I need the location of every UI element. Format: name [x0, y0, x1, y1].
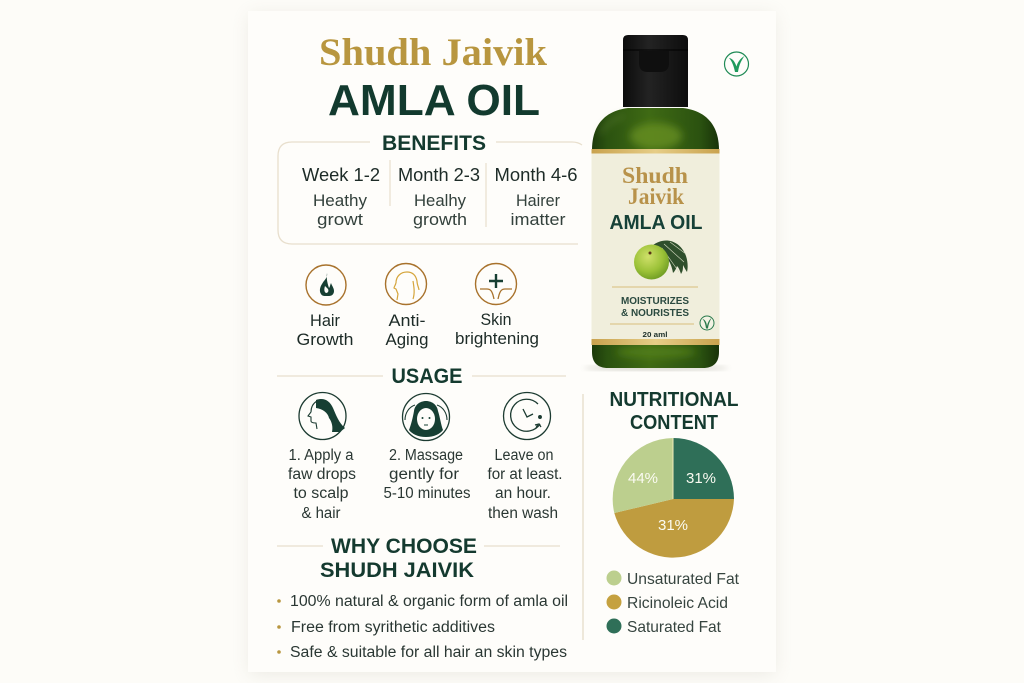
text: step 2: gently for: [389, 466, 459, 483]
text: step 3: an hour.: [495, 485, 551, 502]
text: step 3: [488, 447, 562, 522]
column: month 4-6: Hairer: [516, 192, 560, 210]
icon: apply to scalp: [299, 392, 346, 440]
heading: why choose: SHUDH JAIVIK: [320, 559, 474, 582]
icon: amla fruit: [634, 241, 688, 280]
text: step 2: 5-10 minutes: [384, 485, 471, 502]
bottle label: [592, 149, 720, 345]
heading: nutritional content: [610, 389, 738, 434]
label volume: 20 aml: [642, 330, 668, 339]
column: week 1-2: [302, 165, 380, 229]
title: AMLA OIL: [328, 76, 540, 125]
heading: benefits: BENEFITS: [382, 132, 486, 155]
text: step 2: 2. Massage: [389, 447, 463, 464]
text: step 1: faw drops: [288, 466, 356, 483]
label claim: MOISTURIZES: [621, 295, 689, 307]
pie chart: [613, 438, 734, 558]
icon: skin brightening: [476, 264, 516, 304]
icon: hair growth: [306, 265, 346, 305]
icon: bottle: [592, 35, 720, 368]
column: month 2-3: Month 2-3: [398, 165, 480, 185]
label: skin: Skin: [480, 310, 512, 329]
column: month 4-6: [494, 165, 578, 229]
panel: sheet: [248, 11, 776, 672]
legend: Ricinoleic Acid: [627, 595, 728, 612]
label product name: AMLA OIL: [610, 211, 702, 234]
text: step 3: then wash: [488, 505, 558, 522]
column: week 1-2: Heathy: [313, 192, 368, 210]
label: anti: Anti-: [388, 311, 426, 330]
text: step 2: [384, 447, 471, 502]
text: step 1: 1. Apply a: [288, 447, 354, 464]
bottle shadow: [584, 366, 728, 370]
pie chart: 31%: [686, 470, 716, 487]
legend: [606, 570, 740, 636]
icon: clock: [504, 392, 550, 440]
title: Shudh Jaivik: [319, 31, 547, 74]
title: [319, 31, 547, 125]
bottle cap: [623, 35, 688, 107]
heading: usage: USAGE: [392, 365, 462, 388]
list: reasons: [277, 593, 568, 661]
list: reasons: Safe & suitable for all hair an skin types: [290, 644, 567, 661]
text: step 3: Leave on: [494, 447, 554, 464]
label: growth: Growth: [296, 330, 354, 349]
bottle label: Jaivik: [628, 184, 684, 209]
icon: anti-aging: [386, 264, 426, 304]
icon: vegan badge: [724, 52, 748, 76]
text: step 1: [288, 447, 356, 522]
column: month 2-3: growth: [413, 211, 467, 229]
column: week 1-2: Week 1-2: [302, 165, 380, 185]
list: reasons: 100% natural & organic form of amla oil: [290, 593, 568, 610]
column: month 2-3: Healhy: [414, 192, 467, 210]
heading: nutritional content: NUTRITIONAL: [610, 389, 738, 411]
heading: why choose: WHY CHOOSE: [331, 535, 477, 558]
heading: nutritional content: CONTENT: [630, 412, 718, 434]
column: month 4-6: imatter: [510, 211, 566, 229]
label: hair: Hair: [310, 311, 340, 330]
text: step 1: to scalp: [294, 485, 348, 502]
text: step 3: for at least.: [488, 466, 562, 483]
pie chart: 31%: [658, 517, 688, 534]
legend: Saturated Fat: [627, 619, 722, 636]
column: week 1-2: growt: [317, 211, 363, 229]
column: month 2-3: [398, 165, 480, 229]
pie chart: 44%: [628, 470, 658, 487]
label: aging: Aging: [386, 330, 428, 349]
label: brightening: brightening: [455, 329, 539, 348]
column: month 4-6: Month 4-6: [494, 165, 578, 185]
bottle label: & NOURISTES: [621, 307, 689, 319]
legend: Unsaturated Fat: [627, 571, 740, 588]
list: reasons: Free from syrithetic additives: [291, 619, 495, 636]
icon: massage scalp: [402, 394, 450, 440]
heading: why choose: [320, 535, 477, 582]
panel: benefits: [278, 132, 582, 244]
sheet shadow: [250, 15, 774, 674]
label brand: Shudh: [622, 163, 688, 188]
bottle glass highlights: [600, 116, 696, 358]
text: step 1: & hair: [302, 505, 340, 522]
bottle body: [592, 108, 719, 368]
icon: label vegan mark: [700, 316, 714, 330]
